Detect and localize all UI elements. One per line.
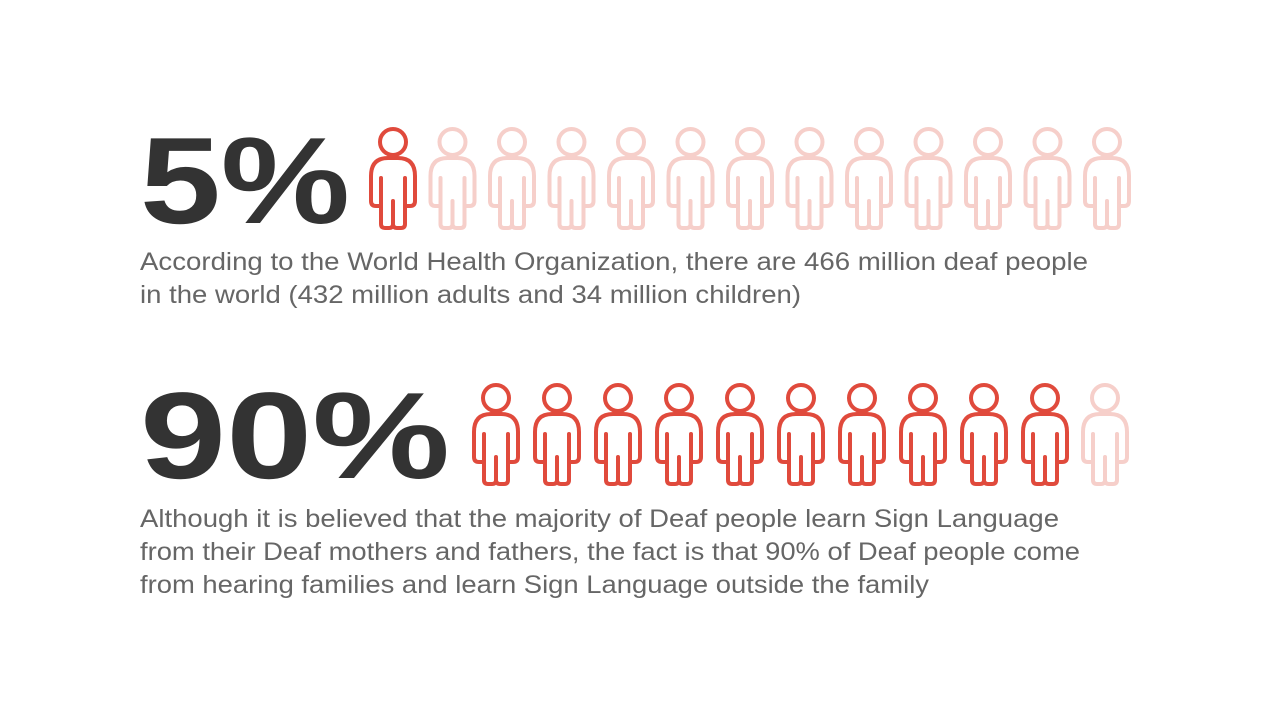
description 1 xyxy=(140,248,1088,309)
description 2 xyxy=(140,505,1080,599)
description 2: from hearing families and learn Sign Language outside the family xyxy=(140,571,930,599)
description 2: from their Deaf mothers and fathers, the fact is that 90% of Deaf people come xyxy=(140,538,1080,566)
description 1: in the world (432 million adults and 34 million children) xyxy=(140,281,801,309)
stat 90% xyxy=(140,368,1127,599)
stat 5% xyxy=(140,113,1129,309)
big number 5%: 5% xyxy=(140,113,350,250)
big number 90%: 90% xyxy=(140,368,450,505)
icon row: 10 of 11 highlighted xyxy=(474,385,1127,484)
description 1: According to the World Health Organization, there are 466 million deaf people xyxy=(140,248,1088,276)
description 2: Although it is believed that the majority of Deaf people learn Sign Language xyxy=(140,505,1059,533)
icon row: 1 of 13 highlighted xyxy=(371,129,1129,228)
